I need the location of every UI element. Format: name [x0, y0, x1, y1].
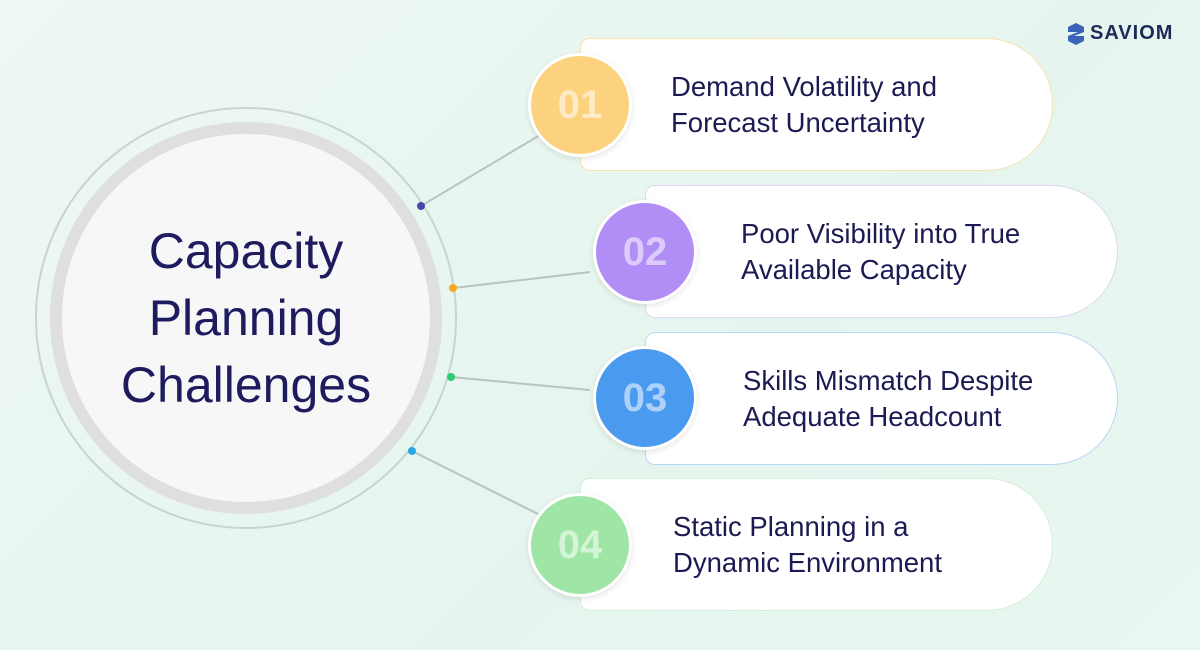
card 2: Poor Visibility into True [741, 218, 1020, 249]
title: Challenges [121, 357, 371, 413]
card 1: Forecast Uncertainty [671, 107, 925, 138]
card 4: Dynamic Environment [673, 547, 942, 578]
card 2 [645, 185, 1118, 318]
card 1: Demand Volatility and [671, 71, 937, 102]
title [121, 223, 371, 413]
title: Planning [149, 290, 343, 346]
badge 03: 03 [623, 376, 667, 420]
logo: SAVIOM [1090, 22, 1173, 44]
badge 01 [528, 53, 632, 157]
card 4 [580, 478, 1053, 611]
badge 04 [528, 493, 632, 597]
badge 04: 04 [558, 522, 602, 566]
title: Capacity [149, 223, 343, 279]
badge 03 [593, 346, 697, 450]
card 2: Available Capacity [741, 254, 967, 285]
card 3 [645, 332, 1118, 465]
card 4: Static Planning in a [673, 511, 908, 542]
card 3: Skills Mismatch Despite [743, 365, 1033, 396]
card 3: Adequate Headcount [743, 401, 1001, 432]
badge 01: 01 [558, 82, 602, 126]
card 1 [580, 38, 1053, 171]
badge 02 [593, 200, 697, 304]
badge 02: 02 [623, 230, 667, 274]
